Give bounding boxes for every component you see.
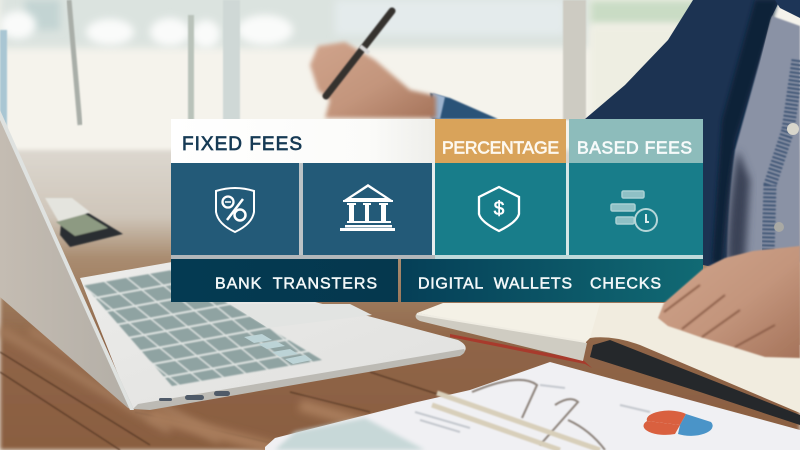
icon: dollar shield: $ [494,199,505,220]
document with clipboard [265,362,800,450]
laptop [0,110,466,410]
pie chart [643,411,713,436]
tile: schedule [569,163,703,255]
businessman jacket and shirt [585,0,800,270]
heading: based fees: BASED FEES [577,138,692,158]
heading: fixed fees: FIXED FEES [182,134,302,155]
icon: bank building [340,184,395,231]
infographic panel [171,119,703,302]
highlighted keys [244,334,312,364]
bottom bar: wallets and checks [401,259,703,302]
laptop base [80,262,466,410]
label: checks: CHECKS [590,276,661,292]
heading: percentage: PERCENTAGE [442,138,559,158]
tile backing gaps [299,163,303,255]
shirt [727,16,800,262]
hand on notebook [658,246,800,358]
glasses and clip [472,380,605,450]
tile: percent shield [171,163,299,255]
icon: percent shield [216,188,254,232]
heading: fixed fees [171,119,435,163]
wooden table [0,150,800,450]
collar [775,0,800,18]
calculator [45,198,123,247]
heading: percentage [435,119,566,163]
jacket [585,0,780,270]
keyboard [84,270,322,386]
tile: dollar shield [435,163,566,255]
lid [0,112,134,410]
notebook [416,303,800,425]
writing hand and pen [310,11,498,119]
bottom bar: bank transfers: BANK TRANSTERS [215,276,377,292]
heading: based fees [569,119,703,163]
tile: bank [303,163,432,255]
bottom bar: bank transfers [171,259,398,302]
ports [159,391,230,401]
icon: time blocks and clock [611,191,657,231]
trackpad [230,304,372,328]
shirt buttons [787,123,799,135]
label: digital wallets: DIGITAL WALLETS [418,276,572,292]
